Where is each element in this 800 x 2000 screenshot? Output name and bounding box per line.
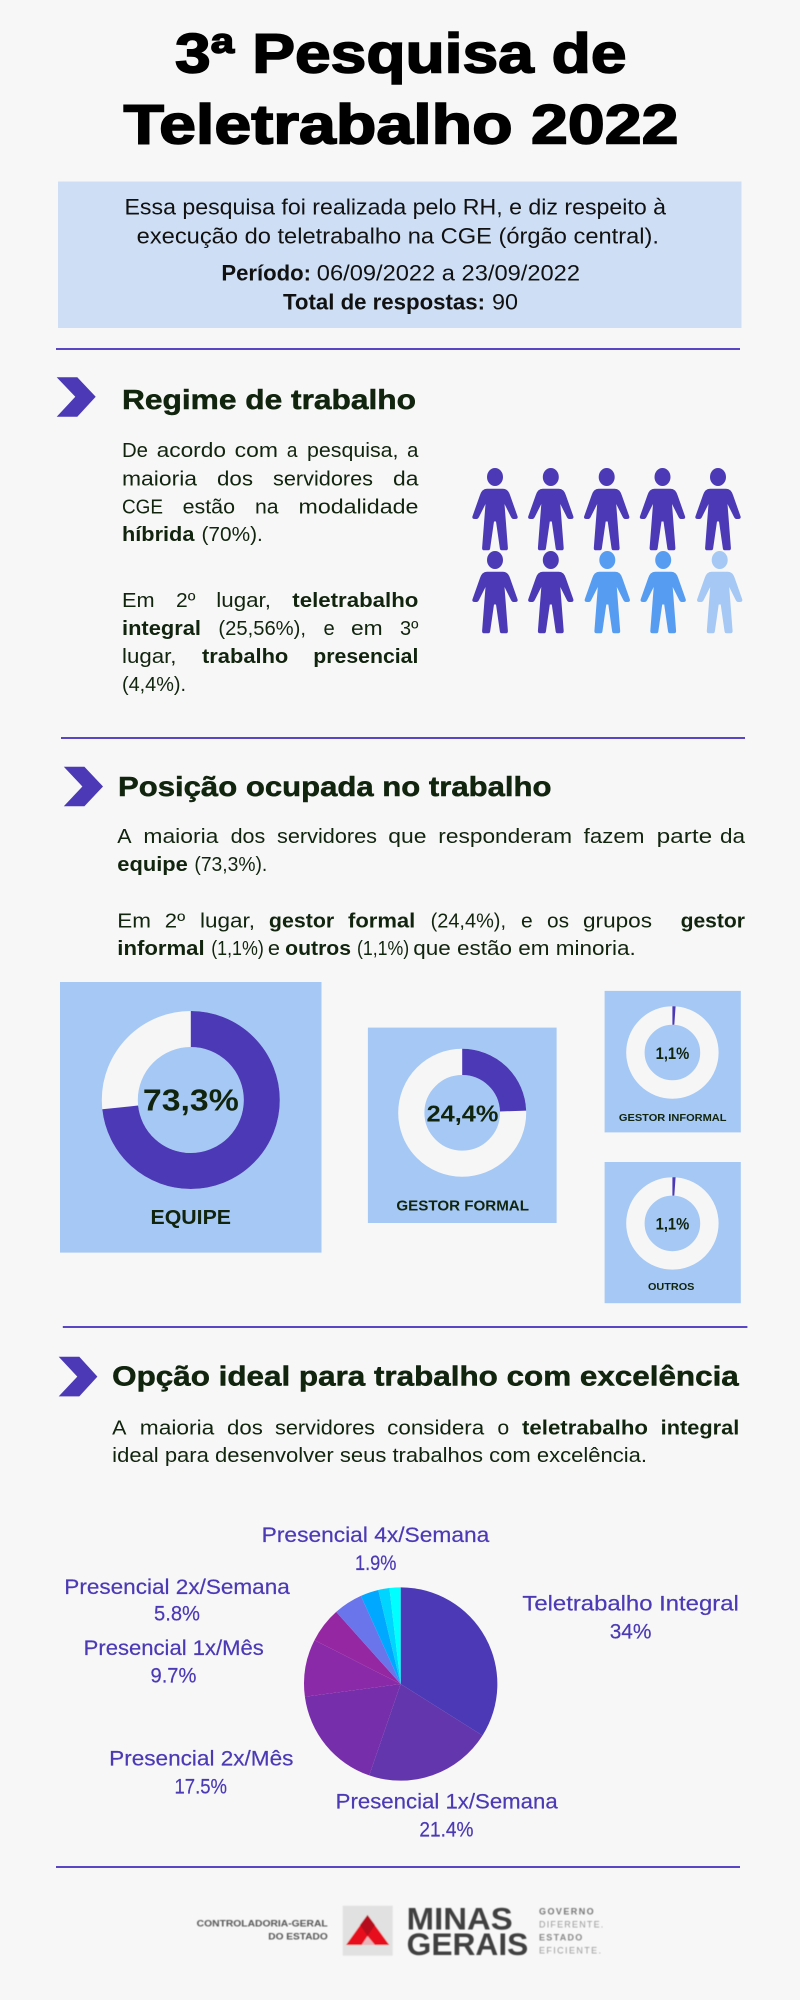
text block: regime paragraph 1: na [255,496,280,518]
heading: posicao ocupada: Posição ocupada no trabalho [118,771,552,802]
text block: regime paragraph 2: 2º [176,590,196,612]
panel: outros donut: OUTROS [648,1281,694,1293]
text block: posicao paragraph 1: equipe [117,854,188,876]
text block: regime paragraph 1: com [235,440,278,462]
text block: regime paragraph 2: Em [122,590,155,612]
text block: posicao paragraph 2: Em [117,911,151,933]
text block: regime paragraph 2: em [351,618,383,640]
panel: intro: 90 [492,290,518,314]
text block: posicao paragraph 2: e [268,938,280,960]
pie labels: Teletrabalho Integral [522,1592,739,1616]
panel: equipe donut: 73,3% [143,1083,239,1118]
text block: opcao paragraph: ideal para desenvolver seus trabalhos com excelência. [112,1445,647,1467]
text block: opcao paragraph: integral [661,1417,739,1439]
pie labels: 5.8% [154,1602,200,1626]
pie labels: Presencial 2x/Semana [64,1575,290,1599]
text block: opcao paragraph: A [112,1417,127,1439]
pie labels: 21.4% [419,1818,474,1842]
pie labels: 1.9% [355,1551,396,1575]
panel: gestor informal donut: GESTOR INFORMAL [619,1112,727,1124]
pie chart [304,1587,497,1781]
icon: chevron regime [57,377,96,417]
heading: regime de trabalho: Regime de trabalho [122,384,416,415]
text block: posicao paragraph 2: outros [285,938,351,960]
title: Teletrabalho 2022 [124,93,678,156]
footer logos [197,1900,603,1962]
panel: equipe donut: EQUIPE [150,1207,231,1229]
text block: regime paragraph 2: lugar, [216,590,271,612]
text block: posicao paragraph 1: (73,3%). [194,854,267,876]
footer logos: DO ESTADO [268,1932,328,1943]
text block: regime paragraph 1: modalidade [298,496,418,518]
text block: posicao paragraph 2: gestor [269,911,334,933]
text block: regime paragraph 2: (25,56%), [218,618,306,640]
text block: regime paragraph 1: estão [183,496,235,518]
text block: regime paragraph 1: CGE [122,496,163,518]
pie labels: 34% [610,1619,652,1643]
panel: gestor formal donut [368,1028,557,1223]
text block: opcao paragraph: teletrabalho [522,1417,648,1439]
text block: posicao paragraph 2: lugar, [200,911,255,933]
title: 3ª Pesquisa de [175,22,626,84]
pie labels: Presencial 1x/Semana [336,1789,558,1813]
footer logos: MINAS [407,1900,513,1936]
text block: regime paragraph 1: híbrida [122,524,195,546]
footer logos: CONTROLADORIA-GERAL [197,1919,328,1930]
text block: posicao paragraph 2: informal [117,938,205,960]
footer logos: GOVERNO [539,1907,594,1917]
footer logos: ESTADO [539,1933,582,1943]
text block: posicao paragraph 2: 2º [165,911,186,933]
text block: opcao paragraph: o [497,1417,509,1439]
text block: regime paragraph 1: De [122,440,148,462]
icon group: people pictogram [472,468,742,633]
panel: intro: Período: [221,260,311,286]
panel: intro [58,182,742,328]
text block: posicao paragraph 2: que estão em minoria. [413,938,636,960]
text block: posicao paragraph 1: servidores [277,826,377,848]
text block: opcao paragraph: considera [387,1417,485,1439]
text block: regime paragraph 2: integral [122,618,201,640]
text block: posicao paragraph 2: (1,1%) [211,938,264,960]
text block: regime paragraph 2: e [324,618,335,640]
footer logos: DIFERENTE. [539,1920,603,1930]
text block: posicao paragraph 1: dos [231,826,265,848]
pie labels: Presencial 1x/Mês [84,1636,264,1660]
pie labels [64,1523,739,1842]
text block: regime paragraph 2: lugar, [122,646,176,668]
text block: regime paragraph 2: (4,4%). [122,674,186,696]
text block: posicao paragraph 1: que [388,826,426,848]
text block: opcao paragraph: servidores [275,1417,375,1439]
text block: posicao paragraph 2 [117,911,745,960]
text block: posicao paragraph 1: A [117,826,132,848]
text block: regime paragraph 2: trabalho [202,646,288,668]
text block: regime paragraph 1: maioria [122,468,198,490]
pie labels: Presencial 2x/Mês [109,1746,293,1770]
panel: equipe donut [60,982,322,1253]
icon: chevron opcao [59,1357,97,1396]
text block: posicao paragraph 2: gestor [681,911,745,933]
panel: intro: Total de respostas: [283,290,485,314]
panel: gestor formal donut: GESTOR FORMAL [396,1197,529,1214]
panel: intro: execução do teletrabalho na CGE (órgão central). [137,223,659,248]
panel: intro: 06/09/2022 a 23/09/2022 [317,260,580,286]
icon: chevron posicao [64,767,103,806]
panel: gestor informal donut [605,991,741,1132]
text block: regime paragraph 2: presencial [313,646,418,668]
text block: regime paragraph 1: dos [217,468,253,490]
text block: posicao paragraph 2: grupos [583,911,652,933]
text block: regime paragraph 2: teletrabalho [292,590,418,612]
text block: posicao paragraph 1: responderam [438,826,572,848]
text block: posicao paragraph 1: da [720,826,746,848]
text block: posicao paragraph 1 [117,826,746,876]
text block: regime paragraph 1 [122,440,419,546]
text block: opcao paragraph: dos [227,1417,263,1439]
text block: posicao paragraph 2: os [547,911,569,933]
panel: gestor informal donut: 1,1% [656,1044,689,1063]
panel: intro: Essa pesquisa foi realizada pelo RH, e diz respeito à [124,194,667,220]
text block: regime paragraph 1: acordo [157,440,226,462]
pie labels: Presencial 4x/Semana [262,1523,489,1547]
footer logos: EFICIENTE. [539,1945,601,1955]
text block: posicao paragraph 2: formal [348,911,415,933]
text block: regime paragraph 1: pesquisa, [307,440,398,462]
text block: posicao paragraph 2: e [521,911,533,933]
text block: regime paragraph 1: da [393,468,419,490]
heading: opcao ideal: Opção ideal para trabalho com excelência [112,1360,739,1392]
footer logos: GERAIS [407,1926,528,1962]
text block: posicao paragraph 1: fazem [584,826,644,848]
text block: posicao paragraph 1: maioria [143,826,219,848]
text block: posicao paragraph 1: parte [657,826,712,848]
panel: outros donut: 1,1% [656,1215,689,1234]
text block: opcao paragraph: maioria [140,1417,215,1439]
text block: opcao paragraph [112,1417,739,1467]
text block: posicao paragraph 2: (24,4%), [431,911,506,933]
text block: regime paragraph 1: servidores [273,468,373,490]
text block: regime paragraph 1: a [287,440,298,462]
text block: regime paragraph 2 [122,590,419,696]
panel: outros donut [605,1162,741,1303]
pie labels: 17.5% [174,1774,227,1798]
text block: regime paragraph 1: (70%). [202,524,263,546]
title [124,22,678,156]
pie labels: 9.7% [150,1664,196,1688]
panel: gestor formal donut: 24,4% [426,1100,498,1126]
text block: regime paragraph 1: a [407,440,419,462]
text block: posicao paragraph 2: (1,1%) [357,938,409,960]
text block: regime paragraph 2: 3º [400,618,419,640]
